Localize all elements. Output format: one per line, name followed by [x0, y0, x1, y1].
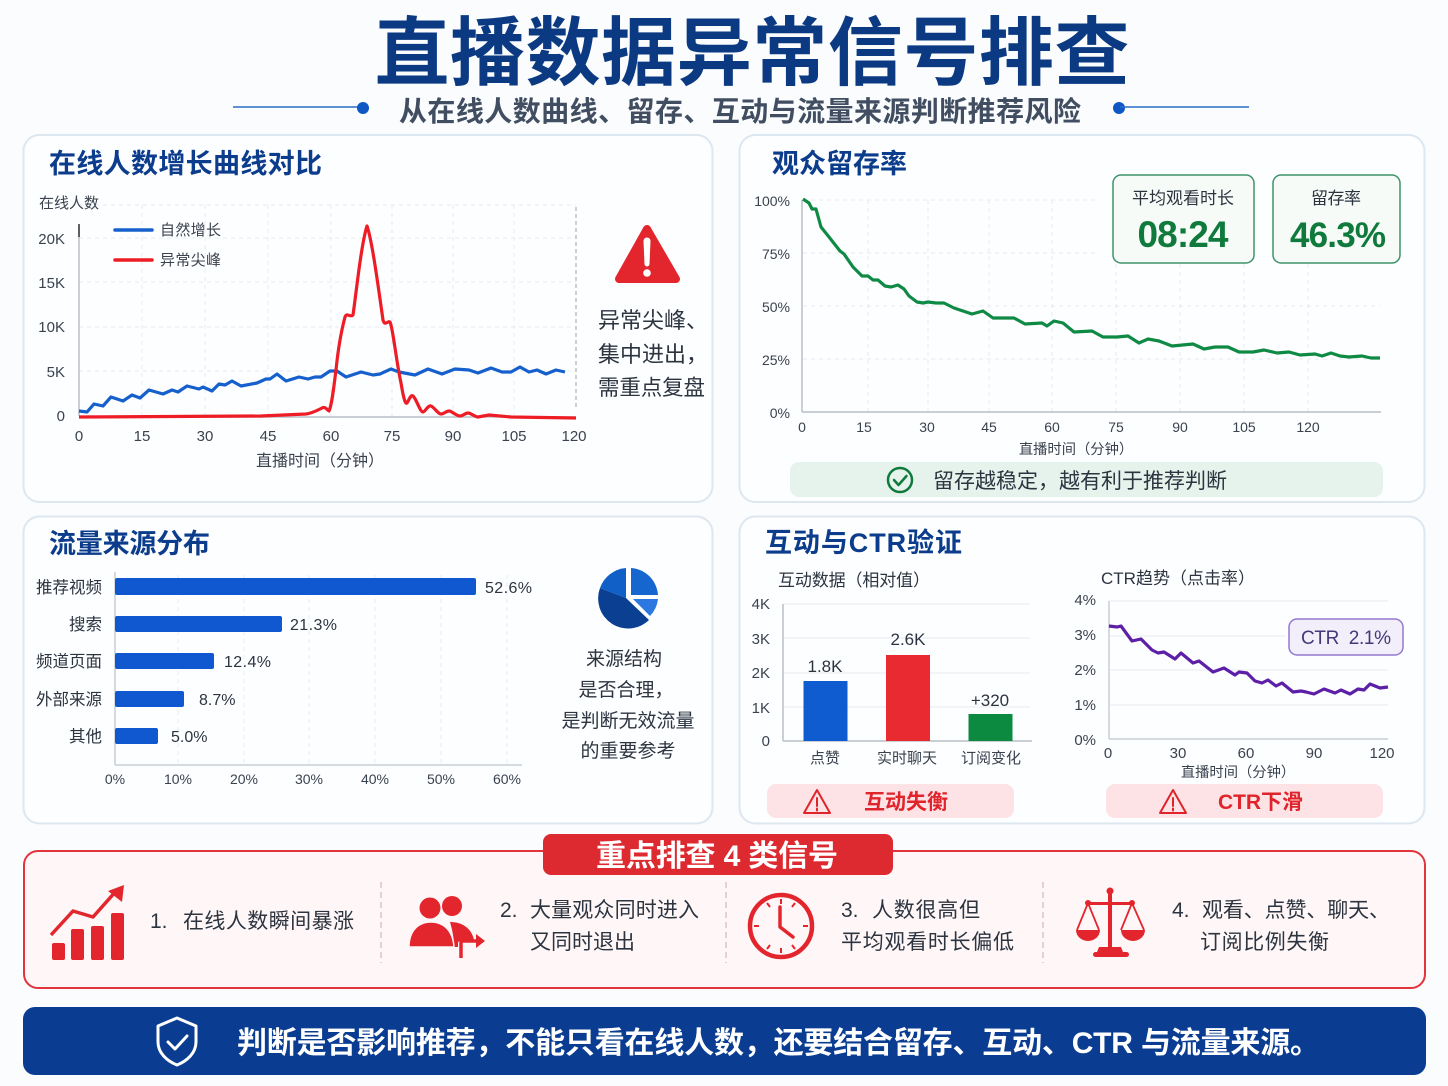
icon: rising bars: [51, 885, 124, 960]
stat card: average watch time: [1113, 175, 1254, 263]
signal 1: viewer surge: [51, 885, 354, 960]
icon: warning outline: [1160, 790, 1186, 813]
alert pill: interaction imbalance: [767, 784, 1014, 818]
line: abnormal spike: [79, 226, 576, 418]
bar chart: interaction data: 2K: [752, 665, 770, 682]
signal 3: high viewers low watch time: 人数很高但: [872, 899, 980, 922]
bar chart: traffic sources: [36, 572, 532, 787]
bar chart: traffic sources: 40%: [361, 771, 389, 787]
bar chart: traffic sources: 5.0%: [171, 729, 207, 746]
line chart: retention curve: 25%: [762, 352, 790, 368]
line chart: retention curve: 0%: [770, 405, 790, 421]
heading badge: four signals: [543, 834, 893, 875]
bar chart: interaction data: 点赞: [810, 750, 840, 767]
signal 2: viewers enter and leave together: 又同时退出: [530, 931, 635, 954]
bar chart: interaction data: 实时聊天: [877, 750, 937, 767]
line chart: natural growth vs abnormal spike: 15K: [38, 275, 65, 292]
signal 3: high viewers low watch time: 3.: [841, 899, 859, 922]
line chart: retention curve: 15: [856, 419, 872, 435]
line chart: retention curve: 105: [1232, 419, 1256, 435]
bar chart: traffic sources: 推荐视频: [36, 578, 102, 597]
bar chart: traffic sources: 其他: [69, 727, 102, 746]
alert pill: interaction imbalance: 互动失衡: [864, 791, 948, 814]
callout: source structure note: 是判断无效流量: [561, 710, 695, 732]
subtitle with side rules: 从在线人数曲线、留存、互动与流量来源判断推荐风险: [399, 96, 1081, 127]
signal 3: high viewers low watch time: 平均观看时长偏低: [841, 931, 1014, 954]
legend: 自然增长: [160, 222, 221, 239]
line chart: CTR trend: 4%: [1074, 592, 1096, 609]
line chart: retention curve: 90: [1172, 419, 1188, 435]
signal 1: viewer surge: 1.: [150, 910, 168, 933]
line chart: natural growth vs abnormal spike: 105: [501, 428, 527, 445]
signal 4: imbalance of ratios: 观看、点赞、聊天、: [1202, 899, 1390, 922]
line chart: retention curve: 75%: [762, 246, 790, 262]
line chart: natural growth vs abnormal spike: 15: [134, 428, 150, 445]
signal 4: imbalance of ratios: 4.: [1172, 899, 1190, 922]
line: natural growth: [79, 367, 565, 412]
bar chart: traffic sources: 频道页面: [36, 652, 102, 671]
line chart: natural growth vs abnormal spike: 60: [323, 428, 339, 445]
signal 4: imbalance of ratios: 订阅比例失衡: [1200, 931, 1329, 954]
legend: [115, 222, 221, 269]
heading: online viewers: 在线人数增长曲线对比: [49, 149, 322, 179]
stat card: retention rate: [1273, 175, 1400, 263]
callout: source structure note: 是否合理，: [578, 679, 674, 701]
bar chart: traffic sources: 52.6%: [485, 580, 532, 597]
bar chart: traffic sources: 12.4%: [224, 654, 271, 671]
callout: abnormal spike note: [598, 308, 708, 400]
line chart: retention curve: 75: [1108, 419, 1124, 435]
line chart: CTR trend: 直播时间（分钟）: [1181, 764, 1295, 781]
icon: warning outline: [804, 790, 830, 813]
line chart: retention curve: 0: [798, 419, 806, 435]
bar chart: traffic sources: 50%: [427, 771, 455, 787]
panel: four key signals: [24, 834, 1425, 988]
line chart: CTR trend: 120: [1369, 745, 1395, 762]
stat card: average watch time: 平均观看时长: [1132, 189, 1234, 208]
line chart: natural growth vs abnormal spike: 0: [57, 408, 65, 425]
bar chart: interaction data: 1K: [752, 700, 770, 717]
line chart: retention curve: 120: [1296, 419, 1320, 435]
footer banner: conclusion: 判断是否影响推荐，不能只看在线人数，还要结合留存、互动、CTR 与流量来源。: [237, 1027, 1320, 1060]
icon: balance scale: [1076, 888, 1145, 957]
line chart: CTR trend: [1074, 569, 1403, 781]
line: CTR: [1109, 626, 1388, 694]
panel: audience retention: [740, 135, 1424, 502]
bar chart: traffic sources: 21.3%: [290, 617, 337, 634]
icon: pie chart: [598, 568, 658, 628]
bar chart: interaction data: 4K: [752, 596, 770, 613]
line chart: natural growth vs abnormal spike: 90: [445, 428, 461, 445]
signal 3: high viewers low watch time: [750, 895, 1014, 957]
line chart: CTR trend: 30: [1170, 745, 1186, 762]
line chart: natural growth vs abnormal spike: 45: [260, 428, 276, 445]
callout: source structure note: 的重要参考: [580, 740, 676, 762]
callout: retention stability note: [790, 462, 1383, 497]
bar chart: traffic sources: 10%: [164, 771, 192, 787]
line chart: CTR trend: CTR趋势（点击率）: [1101, 569, 1255, 588]
callout: source structure note: 来源结构: [586, 648, 662, 670]
line chart: natural growth vs abnormal spike: 20K: [38, 231, 65, 248]
signal 1: viewer surge: 在线人数瞬间暴涨: [183, 910, 354, 933]
panel: online viewers curve comparison: [24, 135, 712, 502]
line chart: natural growth vs abnormal spike: 在线人数: [39, 195, 99, 212]
heading: traffic source: 流量来源分布: [49, 529, 210, 559]
alert pill: CTR decline: CTR下滑: [1218, 791, 1303, 814]
line chart: CTR trend: 60: [1238, 745, 1254, 762]
bar chart: traffic sources: 搜索: [69, 615, 102, 634]
signal 2: viewers enter and leave together: 2.: [500, 899, 518, 922]
bar chart: traffic sources: 0%: [105, 771, 125, 787]
icon: shield check: [158, 1018, 196, 1065]
callout: CTR value: [1289, 619, 1403, 655]
callout: source structure note: [561, 648, 695, 762]
heading: retention: 观众留存率: [772, 149, 907, 179]
callout: retention stability note: 留存越稳定，越有利于推荐判断: [933, 470, 1227, 493]
signal 2: viewers enter and leave together: 大量观众同时进入: [530, 899, 699, 922]
subtitle with side rules: [233, 96, 1249, 127]
bar chart: traffic sources: 30%: [295, 771, 323, 787]
bar chart: traffic sources: 外部来源: [36, 690, 102, 709]
line chart: CTR trend: 0%: [1074, 732, 1096, 749]
line chart: natural growth vs abnormal spike: 120: [561, 428, 587, 445]
bar chart: interaction data: [752, 571, 1032, 767]
bar chart: interaction data: 订阅变化: [961, 750, 1021, 767]
line chart: natural growth vs abnormal spike: 10K: [38, 319, 65, 336]
line chart: retention curve: 45: [981, 419, 997, 435]
line chart: natural growth vs abnormal spike: 30: [197, 428, 213, 445]
line chart: retention curve: 30: [919, 419, 935, 435]
heading badge: four signals: 重点排查 4 类信号: [596, 840, 838, 873]
bar chart: interaction data: +320: [971, 691, 1009, 710]
line chart: CTR trend: 2%: [1074, 662, 1096, 679]
line chart: retention curve: 直播时间（分钟）: [1019, 441, 1133, 458]
line: retention: [803, 199, 1380, 358]
icon: people with arrow: [409, 896, 485, 958]
line chart: CTR trend: 90: [1306, 745, 1322, 762]
callout: abnormal spike note: 需重点复盘: [598, 376, 705, 400]
line chart: natural growth vs abnormal spike: 0: [75, 428, 83, 445]
line chart: natural growth vs abnormal spike: [38, 195, 587, 470]
line chart: CTR trend: 0: [1104, 745, 1112, 762]
heading: interaction and CTR: 互动与CTR验证: [765, 528, 962, 558]
footer banner: conclusion: [23, 1007, 1426, 1075]
line chart: retention curve: [754, 193, 1381, 458]
legend: 异常尖峰: [160, 252, 221, 269]
line chart: natural growth vs abnormal spike: 75: [384, 428, 400, 445]
line chart: retention curve: 60: [1044, 419, 1060, 435]
alert pill: CTR decline: [1106, 784, 1383, 818]
bar chart: interaction data: 3K: [752, 631, 770, 648]
bar chart: interaction data: 互动数据（相对值）: [778, 571, 930, 590]
panel: traffic source distribution: [24, 516, 712, 824]
bar chart: interaction data: 1.8K: [808, 657, 843, 676]
line chart: CTR trend: 1%: [1074, 697, 1096, 714]
panel: interaction and CTR: [740, 516, 1424, 824]
line chart: CTR trend: 3%: [1074, 627, 1096, 644]
bar chart: interaction data: 2.6K: [891, 630, 926, 649]
line chart: natural growth vs abnormal spike: 5K: [47, 364, 65, 381]
callout: CTR value: CTR 2.1%: [1301, 628, 1391, 649]
bar chart: interaction data: 0: [762, 733, 770, 750]
stat card: retention rate: 46.3%: [1290, 216, 1386, 255]
stat card: average watch time: 08:24: [1138, 214, 1229, 255]
icon: warning triangle: [619, 229, 676, 279]
callout: abnormal spike note: 异常尖峰、: [598, 308, 708, 333]
icon: clock: [750, 895, 812, 957]
callout: abnormal spike note: 集中进出，: [598, 342, 708, 367]
bar chart: traffic sources: 20%: [230, 771, 258, 787]
title: 直播数据异常信号排查: [374, 11, 1130, 95]
bar chart: traffic sources: 60%: [493, 771, 521, 787]
signal 4: imbalance of ratios: [1076, 888, 1390, 957]
icon: green check: [888, 468, 912, 492]
signal 2: viewers enter and leave together: [409, 896, 699, 958]
stat card: retention rate: 留存率: [1311, 189, 1361, 208]
bar chart: traffic sources: 8.7%: [199, 692, 235, 709]
line chart: natural growth vs abnormal spike: 直播时间（分钟）: [256, 452, 384, 470]
line chart: retention curve: 50%: [762, 299, 790, 315]
line chart: retention curve: 100%: [754, 193, 790, 209]
